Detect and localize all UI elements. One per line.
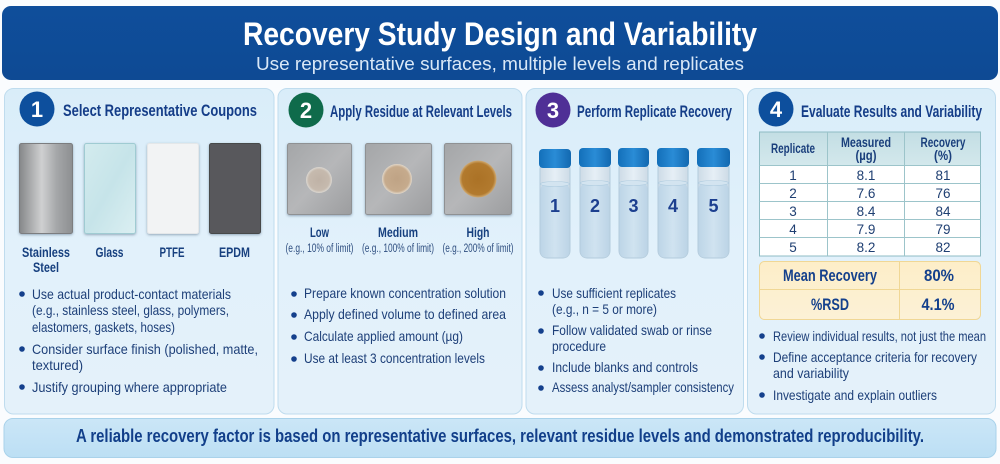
results table: 82 [935, 240, 951, 255]
results table [760, 132, 980, 256]
results table: 1 [789, 168, 797, 183]
coupon: stainless steel [20, 144, 72, 275]
results table: 4 [789, 222, 797, 237]
panel 2 heading: Apply Residue at Relevant Levels [330, 102, 512, 121]
results table: 5 [789, 240, 797, 255]
results table: Recovery [920, 135, 966, 150]
footer takeaway banner [4, 418, 996, 458]
coupon: medium residue: Medium [378, 224, 418, 240]
vial 3 [618, 148, 649, 258]
coupon: low residue: Low [310, 224, 329, 240]
panel 1 bullet list: (e.g., stainless steel, glass, polymers, [32, 302, 229, 318]
panel 3 bullet list: Include blanks and controls [552, 359, 698, 375]
summary box: mean recovery and RSD: 80% [924, 266, 954, 285]
results table: 7.9 [857, 222, 875, 237]
results table: 3 [789, 204, 797, 219]
summary box: mean recovery and RSD [760, 262, 980, 320]
coupon: medium residue [362, 144, 434, 255]
vial 2: 2 [590, 196, 600, 216]
results table: 8.4 [857, 204, 876, 219]
vial 3: 3 [628, 196, 639, 216]
panel 1 bullet list: elastomers, gaskets, hoses) [32, 319, 175, 335]
results table: 2 [789, 186, 797, 201]
results table: Replicate [771, 141, 815, 156]
header banner [2, 6, 998, 80]
vial 5: 5 [708, 196, 719, 216]
panel 1 bullet list: Justify grouping where appropriate [32, 379, 227, 395]
step 1 badge [20, 92, 54, 126]
panel 3 bullet list: Assess analyst/sampler consistency [552, 379, 734, 395]
panel: apply residue [278, 88, 522, 414]
vial 2 [579, 148, 611, 258]
title: Recovery Study Design and Variability [243, 16, 757, 52]
panel 4 bullet list: and variability [773, 365, 849, 381]
coupon: PTFE: PTFE [160, 244, 184, 260]
step 2 badge [288, 92, 324, 128]
results table: 79 [935, 222, 951, 237]
coupon: stainless steel: Steel [33, 259, 59, 275]
panel 3 heading: Perform Replicate Recovery [577, 102, 732, 121]
coupon: glass [84, 144, 136, 260]
panel 3 bullet list: Use sufficient replicates [552, 285, 676, 301]
step 1 badge: 1 [31, 97, 43, 122]
panel 4 bullet list [759, 328, 986, 403]
step 4 badge: 4 [770, 97, 783, 122]
coupon: high residue [442, 144, 514, 255]
coupon: low residue: (e.g., 10% of limit) [286, 243, 354, 255]
panel 3 bullet list: procedure [552, 338, 606, 354]
results table: 7.6 [857, 186, 875, 201]
step 4 badge [758, 92, 794, 126]
step 3 badge [536, 92, 570, 128]
coupon: high residue: (e.g., 200% of limit) [442, 243, 514, 255]
vial 4: 4 [668, 196, 678, 216]
summary box: mean recovery and RSD: %RSD [811, 295, 849, 314]
subtitle: Use representative surfaces, multiple levels and replicates [256, 54, 744, 74]
panel: replicate recovery [526, 88, 744, 414]
vial 1: 1 [550, 196, 560, 216]
results table: (%) [934, 148, 952, 163]
coupon: glass: Glass [96, 244, 124, 260]
panel 1 heading: Select Representative Coupons [63, 101, 257, 120]
panel 3 bullet list: Follow validated swab or rinse [552, 322, 712, 338]
results table: 8.1 [857, 168, 875, 183]
panel 2 bullet list: Use at least 3 concentration levels [304, 350, 485, 366]
results table: 81 [935, 168, 951, 183]
results table: 76 [935, 186, 951, 201]
results table: 8.2 [857, 240, 875, 255]
summary box: mean recovery and RSD: Mean Recovery [783, 266, 877, 285]
panel 2 bullet list: Apply defined volume to defined area [304, 306, 506, 322]
coupon: high residue: High [466, 224, 490, 240]
coupon: medium residue: (e.g., 100% of limit) [362, 243, 434, 255]
results table: (µg) [856, 148, 876, 163]
summary box: mean recovery and RSD: 4.1% [922, 295, 954, 314]
coupon: stainless steel: Stainless [22, 244, 70, 260]
results table: Measured [841, 135, 891, 150]
panel 2 bullet list [291, 285, 506, 366]
coupon: low residue [286, 144, 354, 255]
panel 3 bullet list: (e.g., n = 5 or more) [552, 301, 657, 317]
panel 3 bullet list [538, 285, 734, 395]
results table: 84 [935, 204, 951, 219]
vial 4 [657, 148, 689, 258]
panel 1 bullet list [19, 286, 258, 395]
panel 1 bullet list: Consider surface finish (polished, matte, [32, 341, 258, 357]
step 3 badge: 3 [547, 98, 559, 123]
coupon: EPDM [210, 144, 260, 260]
step 2 badge: 2 [300, 98, 312, 123]
panel: evaluate results [748, 88, 996, 414]
vial 5 [697, 148, 730, 258]
coupon: EPDM: EPDM [219, 244, 250, 260]
vial 1 [539, 149, 571, 258]
panel 1 bullet list: textured) [32, 357, 83, 373]
panel 2 bullet list: Calculate applied amount (µg) [304, 328, 463, 344]
panel 4 bullet list: Investigate and explain outliers [773, 387, 937, 403]
coupon: PTFE [148, 144, 198, 260]
panel 1 bullet list: Use actual product-contact materials [32, 286, 231, 302]
panel 2 bullet list: Prepare known concentration solution [304, 285, 506, 301]
panel: select representative coupons [4, 88, 274, 414]
